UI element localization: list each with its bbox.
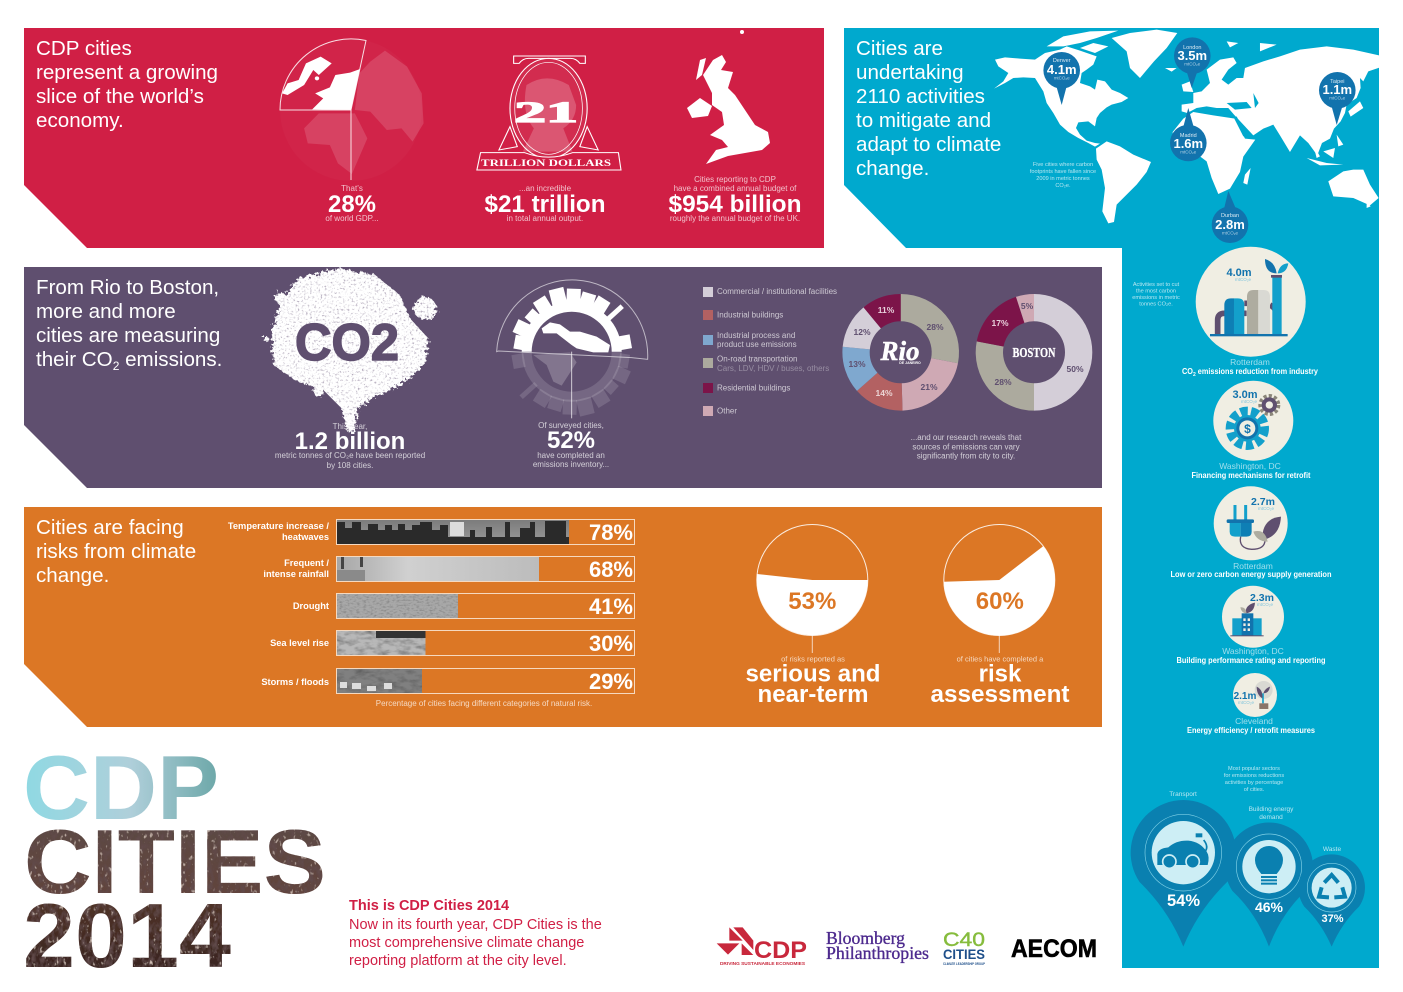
world map xyxy=(994,30,1383,223)
legend: emission sources: Residential buildings xyxy=(717,384,790,392)
icon: plug and leaf xyxy=(1227,505,1281,549)
activity: Cleveland retrofit: Energy efficiency / retrofit measures xyxy=(1187,726,1316,735)
legend: emission sources xyxy=(703,287,837,416)
donut chart: Boston: 50% xyxy=(1066,364,1084,374)
text: 52 percent inventory xyxy=(533,421,609,469)
text: 21 trillion output: ...an incredible xyxy=(519,184,572,193)
logo: AECOM: AECOM xyxy=(1011,935,1097,963)
map pin: Denver: Denver xyxy=(1053,58,1071,64)
map pin: Taipei: 1.1m xyxy=(1322,82,1352,97)
icon: globe wedge xyxy=(280,39,424,181)
donut chart: Rio: 11% xyxy=(878,305,895,315)
text: map note: CO₂e. xyxy=(1055,183,1071,189)
title: CDP Cities 2014 xyxy=(23,738,326,987)
sector pin: Transport xyxy=(1131,791,1236,947)
text: activities note: tonnes CO₂e. xyxy=(1139,302,1173,308)
logo: Bloomberg Philanthropies: Philanthropies xyxy=(826,943,929,963)
icon: building xyxy=(1230,603,1264,636)
activity: Rotterdam industry: emissions reduction from industry xyxy=(1196,367,1318,376)
text: 21 trillion output: in total annual output. xyxy=(507,214,583,223)
text: activities note: emissions in metric xyxy=(1132,295,1180,301)
panel: world economy xyxy=(24,28,824,248)
map pin: London xyxy=(1174,37,1211,88)
pie chart: 53 percent serious xyxy=(746,524,880,708)
text: research note: significantly from city to city. xyxy=(917,452,1015,460)
map pin: Taipei: mtCO₂e xyxy=(1329,96,1346,100)
text: 954 billion budget: Cities reporting to CDP xyxy=(694,175,776,184)
donut chart: Rio: 12% xyxy=(853,327,871,337)
text: 52 percent inventory: emissions inventory... xyxy=(533,460,609,469)
heading: world economy: CDP cities xyxy=(36,37,132,60)
map pin: Durban: mtCO₂e xyxy=(1222,230,1238,236)
bar: rainfall 68%: 68% xyxy=(589,557,633,582)
activity: Cleveland retrofit: Cleveland xyxy=(1235,716,1273,726)
heading: climate risks: Cities are facing xyxy=(36,516,184,539)
donut chart: Boston: BOSTON xyxy=(1012,346,1056,361)
text: map note: footprints have fallen since xyxy=(1030,169,1096,175)
donut chart: Boston: 17% xyxy=(991,318,1009,328)
heading: CO2 measurement: 2 xyxy=(113,359,120,373)
legend: emission sources: Industrial buildings xyxy=(717,310,783,320)
heading: activities: adapt to climate xyxy=(856,133,1001,156)
icon: gears xyxy=(1230,396,1278,446)
text: activities note: the most carbon xyxy=(1136,288,1176,294)
donut chart: Boston xyxy=(976,294,1092,411)
heading: activities: change. xyxy=(856,157,929,180)
heading: activities: undertaking xyxy=(856,61,964,84)
heading: world economy: slice of the world’s xyxy=(36,85,204,108)
activity: Rotterdam energy supply: 2.7m xyxy=(1251,496,1275,508)
donut chart: Rio: 21% xyxy=(920,382,938,392)
bar: storms 29% xyxy=(261,668,634,694)
text: 52 percent inventory: 52% xyxy=(547,427,595,454)
text: 954 billion budget xyxy=(668,175,802,223)
sector pin: Waste: 37% xyxy=(1321,913,1344,925)
text: 954 billion budget: have a combined annual budget of xyxy=(674,184,797,193)
activity: Cleveland retrofit: 2.1m xyxy=(1234,691,1257,702)
sector pin: Transport: Transport xyxy=(1169,791,1197,798)
bar: temperature increase 78% xyxy=(228,520,634,545)
text: 28 percent of world GDP: 28% xyxy=(328,191,376,218)
icon: dollar bill: TRILLION DOLLARS xyxy=(481,159,611,169)
text: 28 percent of world GDP: of world GDP... xyxy=(325,214,379,223)
activity: Rotterdam energy supply: Low or zero carbon energy supply generation xyxy=(1170,570,1332,579)
activity: Washington financing: Washington, DC xyxy=(1219,461,1281,471)
map pin: London: 3.5m xyxy=(1177,48,1207,63)
heading: CO2 measurement: more and more xyxy=(36,300,176,323)
donut chart: Rio xyxy=(842,294,959,411)
heading: activities: to mitigate and xyxy=(856,109,991,132)
bar: temperature increase 78%: heatwaves xyxy=(282,532,329,542)
heading: activities: Cities are xyxy=(856,37,943,60)
activity: Washington financing: $ xyxy=(1244,422,1251,436)
activity: Washington financing: Financing mechanisms for retrofit xyxy=(1192,471,1311,480)
donut chart: Boston: 5% xyxy=(1021,301,1034,311)
logo: CDP: DRIVING SUSTAINABLE ECONOMIES xyxy=(720,961,805,966)
legend: emission sources: Commercial / institutional facilities xyxy=(717,287,837,296)
bar: drought 41%: Drought xyxy=(293,601,329,611)
bar: rainfall 68% xyxy=(263,556,634,582)
heading: CO2 measurement: emissions. xyxy=(119,348,222,371)
icon: CO2 cloud: CO2 xyxy=(295,314,399,372)
text: this is CDP Cities: Now in its fourth year, CDP Cities is the xyxy=(349,917,602,933)
activity: Washington financing: mtCO₂e xyxy=(1241,399,1257,404)
text: 954 billion budget: roughly the annual budget of the UK. xyxy=(670,214,800,223)
map pin: London: mtCO₂e xyxy=(1184,62,1201,66)
icon: UK map xyxy=(687,30,770,164)
title: CDP Cities 2014: 2014 xyxy=(23,886,231,987)
text: this is CDP Cities xyxy=(349,898,602,969)
activity: Rotterdam energy supply xyxy=(1170,486,1332,579)
activity: Washington financing: 3.0m xyxy=(1232,389,1258,401)
activity: Rotterdam energy supply: mtCO₂e xyxy=(1258,506,1274,511)
heading: world economy: economy. xyxy=(36,109,124,132)
activity: Rotterdam industry: Rotterdam xyxy=(1230,357,1270,367)
heading: CO2 measurement: From Rio to Boston, xyxy=(36,276,219,299)
icon: CO2 cloud xyxy=(263,268,436,432)
heading: activities: 2110 activities xyxy=(856,85,985,108)
pie chart: 53 percent serious: near-term xyxy=(758,681,868,708)
donut chart: Boston: 28% xyxy=(994,377,1012,387)
sector pin: Building energy demand: 46% xyxy=(1255,899,1284,915)
activity: Washington financing xyxy=(1192,381,1311,480)
logo: C40 Cities: CITIES xyxy=(943,947,985,962)
heading: world economy: represent a growing xyxy=(36,61,218,84)
pie chart: 60 percent assessed: 60% xyxy=(976,588,1024,615)
text: research note: ...and our research reveals that xyxy=(911,433,1022,442)
text: 1.2 billion tonnes: by 108 cities. xyxy=(327,461,373,470)
text: popular sectors note: of cities. xyxy=(1244,787,1265,793)
heading: climate risks: change. xyxy=(36,564,109,587)
text: 21 trillion output: $21 trillion xyxy=(484,191,606,218)
activity: Washington building rating: Washington, DC xyxy=(1222,646,1284,656)
legend: emission sources: Industrial process and xyxy=(717,331,795,340)
panel: CO2 measurement xyxy=(24,267,1102,488)
legend: emission sources: product use emissions xyxy=(717,340,797,349)
activity: Rotterdam industry: mtCO₂e xyxy=(1235,277,1251,282)
text: research note: sources of emissions can vary xyxy=(912,442,1020,452)
logo: CDP xyxy=(717,927,807,966)
activity: Rotterdam industry: CO xyxy=(1182,367,1194,376)
bar: temperature increase 78%: Temperature increase / xyxy=(228,521,329,531)
logo: C40 Cities: CLIMATE LEADERSHIP GROUP xyxy=(943,962,986,966)
logo: C40 Cities: C40 xyxy=(943,930,985,951)
donut chart: Rio: Rio xyxy=(879,336,920,366)
activity: Washington building rating: Building performance rating and reporting xyxy=(1176,656,1326,665)
activity: Rotterdam industry: 2 xyxy=(1193,372,1196,378)
pie chart: 60 percent assessed: assessment xyxy=(930,681,1070,708)
sector pin: Waste: Waste xyxy=(1323,846,1341,853)
icon: recycle xyxy=(1319,875,1345,897)
legend: emission sources: Cars, LDV, HDV / buses, others xyxy=(717,364,829,373)
text: risk chart caption: Percentage of cities facing different categories of natural risk. xyxy=(376,699,592,708)
text: 1.2 billion tonnes xyxy=(275,422,425,470)
text: 1.2 billion tonnes: This year, xyxy=(333,422,367,431)
donut chart: Rio: 28% xyxy=(926,322,944,332)
map pin: Madrid: mtCO₂e xyxy=(1180,150,1197,154)
logo: Bloomberg Philanthropies: Bloomberg xyxy=(826,928,905,948)
map pin: Taipei: Taipei xyxy=(1330,79,1344,85)
pie chart: 53 percent serious: 53% xyxy=(788,588,836,615)
map pin: Durban: Durban xyxy=(1221,213,1239,219)
panel: climate activities xyxy=(844,28,1383,968)
logo: CDP: CDP xyxy=(754,937,807,964)
bar: storms 29%: 29% xyxy=(589,669,633,694)
legend: emission sources: Other xyxy=(717,406,737,416)
text: 1.2 billion tonnes: metric tonnes of CO₂e have been reported xyxy=(275,451,425,460)
map pin: Denver xyxy=(1043,52,1080,105)
logo: Bloomberg Philanthropies xyxy=(826,928,929,963)
text: 52 percent inventory: have completed an xyxy=(537,451,605,460)
pie chart: 60 percent assessed: risk xyxy=(979,660,1022,688)
activity: Washington building rating xyxy=(1176,586,1326,665)
activity: Rotterdam energy supply: Rotterdam xyxy=(1233,561,1273,571)
text: 52 percent inventory: Of surveyed cities, xyxy=(538,421,604,430)
sector pin: Waste xyxy=(1298,846,1365,947)
map pin: Madrid: Madrid xyxy=(1180,133,1197,139)
text: this is CDP Cities: most comprehensive climate change xyxy=(349,935,584,951)
panel: climate risks xyxy=(24,507,1102,727)
map pin: Durban xyxy=(1212,191,1248,243)
bar: sea level rise 30% xyxy=(270,630,634,656)
icon: light bulb plant xyxy=(1255,681,1273,709)
text: this is CDP Cities: This is CDP Cities 2014 xyxy=(349,898,509,914)
icon: dollar bill: 21 xyxy=(514,96,578,129)
icon: light bulb xyxy=(1255,846,1283,885)
bar: rainfall 68%: intense rainfall xyxy=(263,569,329,579)
pie chart: 53 percent serious: of risks reported as xyxy=(781,654,845,664)
sector pin: Transport: 54% xyxy=(1167,892,1200,910)
map pin: London: London xyxy=(1183,45,1201,51)
bar: temperature increase 78%: 78% xyxy=(589,520,633,545)
text: 954 billion budget: $954 billion xyxy=(668,191,802,218)
map pin: Denver: 4.1m xyxy=(1047,62,1077,77)
text: this is CDP Cities: reporting platform at the city level. xyxy=(349,953,567,969)
heading: CO2 measurement: cities are measuring xyxy=(36,324,220,347)
text: 28 percent of world GDP xyxy=(325,184,379,223)
donut chart: Rio: 13% xyxy=(848,359,866,369)
activity: Washington building rating: 2.3m xyxy=(1250,592,1274,604)
icon: dollar bill xyxy=(477,56,621,170)
title: CDP Cities 2014: CITIES xyxy=(24,812,326,913)
text: 21 trillion output xyxy=(484,184,606,223)
text: popular sectors note: for emissions reductions xyxy=(1224,773,1284,779)
text: map note: Five cities where carbon xyxy=(1033,162,1093,168)
map pin: Madrid xyxy=(1170,108,1207,161)
text: activities note: Activities set to cut xyxy=(1133,282,1180,288)
text: 1.2 billion tonnes: 1.2 billion xyxy=(295,428,405,455)
bar: rainfall 68%: Frequent / xyxy=(284,558,329,568)
pie chart: 60 percent assessed: of cities have completed a xyxy=(957,654,1044,664)
logo: C40 Cities xyxy=(943,930,986,966)
sector pin: Building energy demand: Building energy xyxy=(1249,806,1294,813)
bar: drought 41% xyxy=(293,594,634,619)
title: CDP Cities 2014: CDP xyxy=(23,738,219,839)
bar: sea level rise 30%: 30% xyxy=(589,631,633,656)
activity: Cleveland retrofit xyxy=(1187,673,1316,735)
text: popular sectors note: activities by percentage xyxy=(1225,780,1283,786)
text: popular sectors note: Most popular sectors xyxy=(1228,766,1280,772)
donut chart: Rio: DE JANEIRO xyxy=(899,361,921,365)
heading: CO2 measurement: their CO xyxy=(36,348,113,371)
heading: climate risks: risks from climate xyxy=(36,540,196,563)
map pin: Taipei xyxy=(1319,72,1356,125)
activity: Rotterdam industry xyxy=(1182,247,1318,378)
icon: electric car xyxy=(1157,833,1209,868)
sector pin: Building energy demand: demand xyxy=(1259,814,1283,821)
donut chart: Rio: 14% xyxy=(875,388,893,398)
map pin: Durban: 2.8m xyxy=(1215,217,1245,232)
pie chart: 60 percent assessed xyxy=(930,524,1070,708)
map pin: Denver: mtCO₂e xyxy=(1054,76,1070,80)
icon: half globe skyline xyxy=(497,280,648,418)
activity: Washington building rating: mtCO₂e xyxy=(1257,602,1273,607)
pie chart: 53 percent serious: serious and xyxy=(746,660,880,688)
text: map note: 2009 in metric tonnes xyxy=(1036,176,1090,182)
legend: emission sources: On-road transportation xyxy=(717,354,798,364)
bar: sea level rise 30%: Sea level rise xyxy=(270,638,329,648)
activity: Rotterdam industry: 4.0m xyxy=(1226,267,1252,279)
bar: drought 41%: 41% xyxy=(589,594,633,619)
activity: Cleveland retrofit: mtCO₂e xyxy=(1238,700,1254,705)
icon: factory xyxy=(1210,259,1288,336)
sector pin: Building energy demand xyxy=(1225,806,1313,947)
bar: storms 29%: Storms / floods xyxy=(261,677,329,687)
text: 28 percent of world GDP: That’s xyxy=(341,184,363,193)
map pin: Madrid: 1.6m xyxy=(1173,136,1203,151)
